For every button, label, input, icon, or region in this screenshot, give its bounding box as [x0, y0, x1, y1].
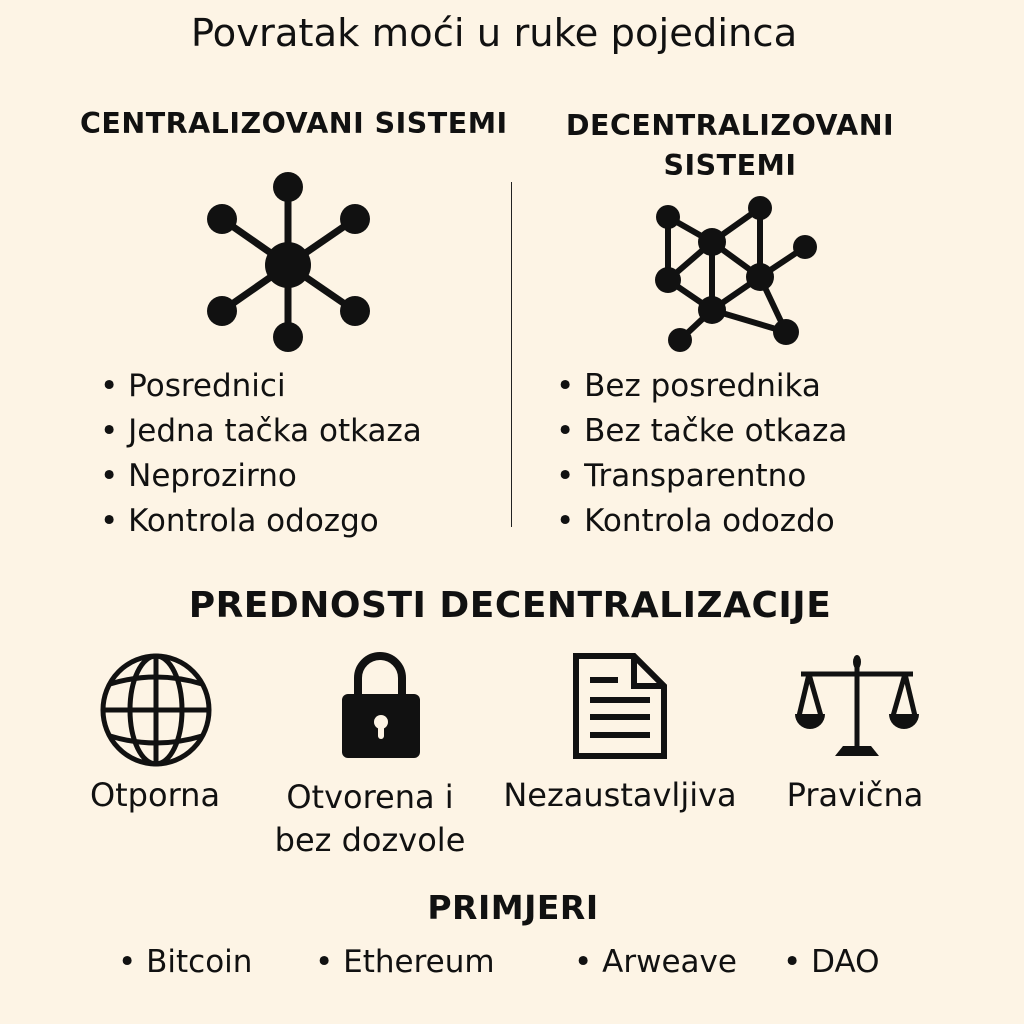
examples list: [118, 944, 880, 980]
label: Nezaustavljiva: Nezaustavljiva: [503, 776, 737, 814]
icon: lock: [342, 652, 420, 758]
heading: decentralized: [566, 109, 894, 182]
label: Otvorena i bez dozvole: bez dozvole: [275, 821, 465, 859]
heading: decentralized: DECENTRALIZOVANI: [566, 109, 894, 142]
list: decentralized: [556, 368, 847, 539]
heading: decentralized: SISTEMI: [663, 149, 797, 182]
examples list: • DAO: [783, 944, 880, 980]
list: centralized: • Neprozirno: [100, 458, 297, 494]
list: centralized: • Kontrola odozgo: [100, 503, 379, 539]
list: decentralized: • Bez tačke otkaza: [556, 413, 847, 449]
list: centralized: • Posrednici: [100, 368, 286, 404]
heading: centralized: CENTRALIZOVANI SISTEMI: [80, 107, 508, 140]
icon: document: [573, 653, 667, 759]
icon: scales: [795, 655, 919, 756]
heading: examples: PRIMJERI: [427, 888, 599, 927]
label: Otvorena i bez dozvole: [275, 778, 465, 859]
examples list: • Ethereum: [315, 944, 495, 980]
icon: decentralized network: [655, 196, 817, 352]
label: Pravična: Pravična: [787, 776, 923, 814]
list: decentralized: • Kontrola odozdo: [556, 503, 835, 539]
divider line: [511, 182, 512, 527]
list: decentralized: • Bez posrednika: [556, 368, 821, 404]
examples list: • Bitcoin: [118, 944, 252, 980]
heading: benefits: PREDNOSTI DECENTRALIZACIJE: [189, 585, 831, 626]
label: Otvorena i bez dozvole: Otvorena i: [286, 778, 454, 816]
list: centralized: • Jedna tačka otkaza: [100, 413, 422, 449]
examples list: • Arweave: [574, 944, 737, 980]
icon: centralized network: [207, 172, 370, 352]
list: centralized: [100, 368, 422, 539]
icon: globe: [100, 654, 212, 766]
label: Otporna: Otporna: [90, 776, 220, 814]
title: Povratak moći u ruke pojedinca: [191, 11, 797, 56]
list: decentralized: • Transparentno: [556, 458, 806, 494]
